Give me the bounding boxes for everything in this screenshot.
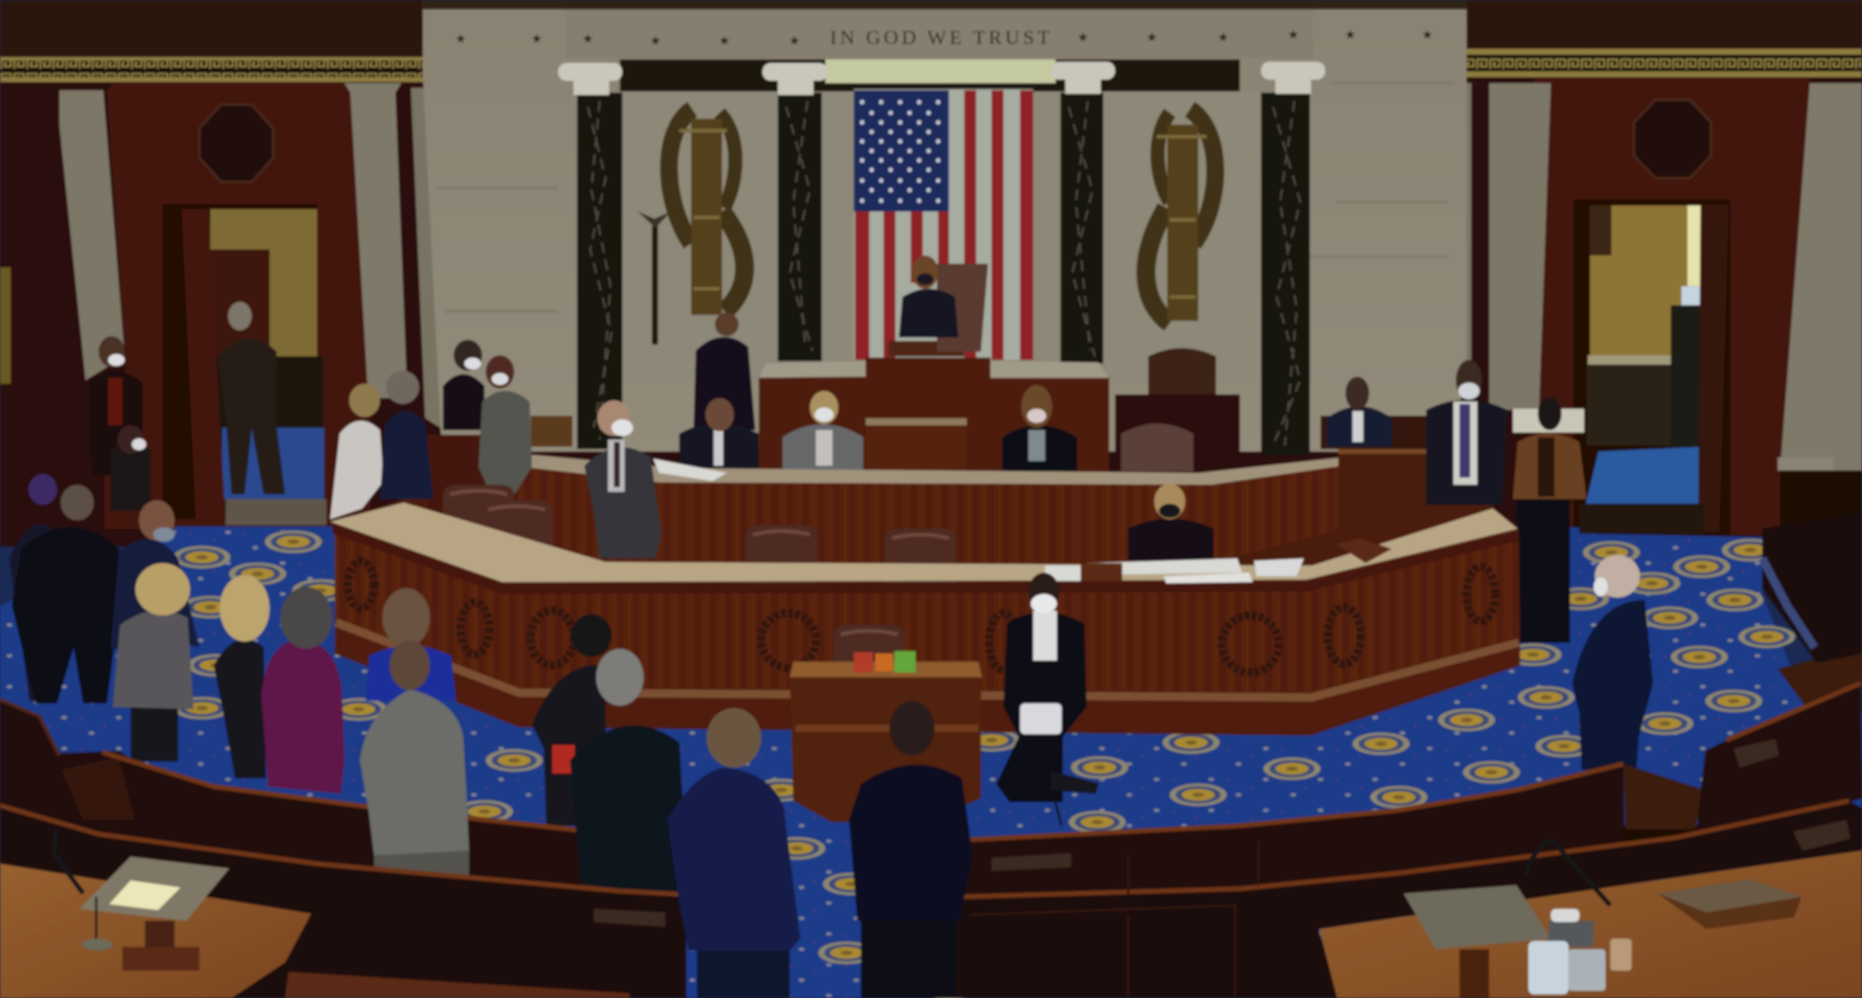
stars on entablature: ★ xyxy=(1422,28,1433,43)
right lectern, microphone and desk items xyxy=(1404,840,1801,998)
stars on entablature: ★ xyxy=(650,34,661,49)
bottom right desk xyxy=(1319,851,1862,998)
column capitals xyxy=(558,62,1325,95)
rostrum lower tier front xyxy=(330,503,1520,735)
bottom left desk xyxy=(0,864,311,998)
man standing behind rostrum xyxy=(694,312,755,430)
man standing in suit, rear right xyxy=(1426,360,1507,505)
fasces left xyxy=(669,109,745,315)
row one benches, left xyxy=(0,700,582,903)
rostrum top tier: speaker desk xyxy=(759,341,1109,478)
stars on entablature: ★ xyxy=(582,32,594,47)
woman in brown jacket xyxy=(1513,397,1586,643)
rostrum middle tier xyxy=(428,435,1433,563)
carved wreaths on rostrum xyxy=(348,561,1495,672)
fasces right xyxy=(1146,109,1215,323)
high backed chair right xyxy=(1115,348,1240,473)
stars on entablature: ★ xyxy=(1146,31,1158,46)
american flag xyxy=(854,89,1033,360)
row two benches, right xyxy=(956,801,1862,998)
background: dark upper walls xyxy=(0,0,1862,547)
greek key frieze left xyxy=(0,57,425,82)
women in left foreground group xyxy=(113,563,456,794)
stars on entablature: ★ xyxy=(1287,28,1299,43)
stars on entablature: ★ xyxy=(531,32,543,47)
seated staff, upper desk xyxy=(679,385,1077,472)
carpet with medallions xyxy=(0,526,1862,998)
man in navy suit, back view xyxy=(667,708,800,998)
chairs behind lower desk xyxy=(443,485,956,588)
right wall panel with doorway xyxy=(1454,77,1862,535)
chair by top tier xyxy=(1121,424,1193,472)
chair behind podium xyxy=(834,625,905,684)
left wall panel with doorway xyxy=(0,83,444,529)
stars on entablature xyxy=(455,28,1433,49)
inscription: IN GOD WE TRUST xyxy=(830,27,1050,49)
bald man at right xyxy=(1572,555,1653,770)
podium with colored boxes xyxy=(790,651,982,822)
woman with red purse xyxy=(532,614,612,826)
stars on entablature: ★ xyxy=(1077,31,1089,46)
stars on entablature: ★ xyxy=(719,34,730,49)
rostrum seated man far right xyxy=(1320,377,1427,449)
center stone wall xyxy=(423,0,1468,451)
seated clerk with stenotype xyxy=(996,573,1097,826)
stars on entablature: ★ xyxy=(455,32,467,47)
man in gray jacket, back view xyxy=(360,640,469,879)
gray haired man, back view xyxy=(570,649,684,897)
stars on entablature: ★ xyxy=(789,34,800,49)
row two benches, left xyxy=(0,806,686,998)
marble columns xyxy=(577,93,1310,455)
speaker of the house xyxy=(899,255,958,337)
people in left corner and doorway xyxy=(10,302,285,703)
rostrum base plate xyxy=(335,499,1520,735)
man in gray suit at rostrum xyxy=(584,400,661,558)
papers and items on clerk desk xyxy=(1045,538,1392,583)
standing women near left door xyxy=(330,340,572,519)
stars on entablature: ★ xyxy=(1344,28,1356,43)
central lectern on upper desk xyxy=(866,418,967,481)
left lectern and microphone xyxy=(53,829,229,971)
man in black suit, back view xyxy=(849,701,973,998)
greek key frieze right xyxy=(1464,49,1862,77)
row one benches, right xyxy=(964,511,1862,915)
eagle staff xyxy=(638,211,671,345)
clerk at lower desk xyxy=(1128,484,1214,561)
stars on entablature: ★ xyxy=(1217,31,1229,46)
speaker chair xyxy=(937,264,988,352)
